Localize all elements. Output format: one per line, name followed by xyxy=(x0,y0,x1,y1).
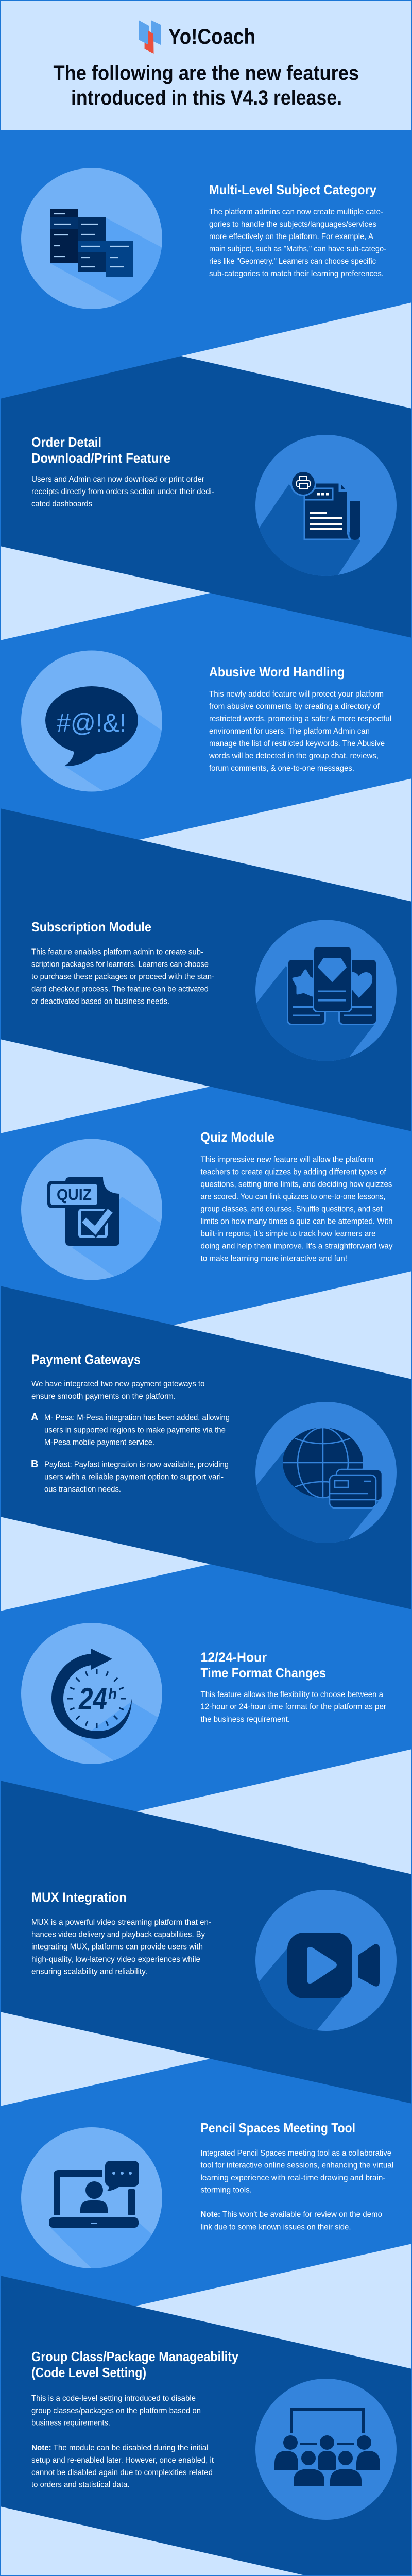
panel: subscription module xyxy=(31,919,397,1069)
panel: light wedge right 5 xyxy=(135,2244,412,2369)
heading: Group Class/Package Manageability xyxy=(31,2349,238,2364)
panel: light wedge right 1 xyxy=(181,302,412,409)
list item B xyxy=(31,1459,229,1494)
body text: Users and Admin can now download or print order xyxy=(31,475,205,484)
title xyxy=(54,62,359,109)
heading: Order Detail xyxy=(31,434,101,450)
heading xyxy=(201,1650,326,1681)
list item A: A xyxy=(31,1412,38,1423)
heading: Time Format Changes xyxy=(201,1665,326,1681)
body text: or deactivated based on business needs. xyxy=(31,997,169,1006)
body text: cannot be disabled again due to complexities related xyxy=(31,2468,213,2477)
icon: globe and card xyxy=(255,1402,397,1543)
list item A: M- Pesa: M-Pesa integration has been added, allowing xyxy=(44,1414,230,1422)
body text: This is a code-level setting introduced to disable xyxy=(31,2394,196,2403)
list item B: ous transaction needs. xyxy=(44,1485,121,1494)
heading: Quiz Module xyxy=(200,1129,274,1145)
panel: dark band 2 xyxy=(0,808,412,1131)
panel: light wedge right 3 xyxy=(174,1271,412,1379)
panel: abusive word handling xyxy=(21,650,391,804)
heading xyxy=(31,2349,238,2380)
body text xyxy=(31,1918,211,1976)
body text xyxy=(31,475,214,509)
intro text xyxy=(31,1380,205,1401)
panel: payment gateways xyxy=(31,1352,397,1556)
body text: Note: The module can be disabled during the initial xyxy=(31,2444,208,2452)
body text: receipts directly from orders section under their dedi- xyxy=(31,487,214,496)
intro text: We have integrated two new payment gateways to xyxy=(31,1380,205,1388)
body text: The platform admins can now create multiple cate- xyxy=(209,208,383,216)
body text: ries like "Geometry." Learners can choose specific xyxy=(209,257,376,266)
icon: category columns xyxy=(21,168,162,309)
icon: printable document xyxy=(255,435,397,576)
body text: link due to some known issues on their side. xyxy=(201,2223,351,2232)
body text: Note: This won't be available for review on the demo xyxy=(201,2210,382,2219)
body text: to make learning more interactive and fun! xyxy=(201,1254,347,1263)
icon: 24h clock: h xyxy=(108,1686,117,1703)
body text: MUX is a powerful video streaming platform that en- xyxy=(31,1918,211,1927)
panel: light wedge left 2 xyxy=(0,1039,210,1133)
body text: storming tools. xyxy=(201,2185,252,2195)
body text: ensuring scalability and reliability. xyxy=(31,1967,147,1976)
body text: This feature enables platform admin to create sub- xyxy=(31,948,203,956)
heading: (Code Level Setting) xyxy=(31,2365,146,2380)
body text: high-quality, low-latency video experiences while xyxy=(31,1955,200,1964)
heading: Pencil Spaces Meeting Tool xyxy=(201,2120,355,2136)
body text: This newly added feature will protect your platform xyxy=(209,690,384,699)
body text xyxy=(209,208,386,278)
heading: 12/24-Hour xyxy=(201,1650,267,1665)
panel: light wedge left 4 xyxy=(0,2012,210,2106)
body text: environment for users. The platform Admin can xyxy=(209,727,370,736)
body text: Integrated Pencil Spaces meeting tool as a collaborative xyxy=(201,2149,391,2158)
heading: Abusive Word Handling xyxy=(209,664,345,680)
heading xyxy=(31,434,170,466)
body text: the business requirement. xyxy=(201,1715,290,1724)
body text: This impressive new feature will allow the platform xyxy=(201,1155,374,1164)
body text: tool for interactive online sessions, enhancing the virtual xyxy=(201,2161,393,2170)
intro text: ensure smooth payments on the platform. xyxy=(31,1392,176,1401)
body text xyxy=(209,690,391,773)
list item B: Payfast: Payfast integration is now available, providing xyxy=(44,1460,229,1469)
heading: MUX Integration xyxy=(31,1890,127,1905)
body text xyxy=(31,2394,214,2489)
body text xyxy=(201,2149,393,2232)
list item A: users in supported regions to make payments via the xyxy=(44,1426,226,1434)
panel: dark band 4 xyxy=(0,1781,412,2104)
body text: forum comments, & one-to-one messages. xyxy=(209,764,354,773)
body text: group classes/packages on the platform based on xyxy=(31,2406,201,2415)
body text: group classes, and courses. Shuffle questions, and set xyxy=(201,1205,383,1214)
icon: quiz document: QUIZ xyxy=(57,1185,92,1204)
body text: cated dashboards xyxy=(31,500,92,509)
panel: 12/24-hour time format xyxy=(21,1623,386,1764)
panel: order detail download/print xyxy=(31,434,397,588)
icon: laptop video meeting xyxy=(21,2127,162,2268)
icon: speech bubble with symbols: #@!&! xyxy=(57,708,126,737)
panel: light wedge left 5 xyxy=(0,2506,307,2576)
icon: quiz document xyxy=(21,1139,162,1280)
heading: Multi-Level Subject Category xyxy=(209,182,376,197)
panel: dark band 1 xyxy=(0,356,412,638)
list item B: users with a reliable payment option to support vari- xyxy=(44,1472,224,1482)
body text xyxy=(201,1690,387,1724)
panel: light wedge right 4 xyxy=(136,1749,412,1874)
panel: pencil spaces meeting tool xyxy=(21,2120,393,2277)
list item A xyxy=(31,1412,230,1447)
icon: group class xyxy=(255,2379,397,2520)
body text: sub-categories to match their learning preferences. xyxy=(209,269,384,278)
body text: doing and help them improve. It’s a straightforward way xyxy=(201,1242,392,1251)
logo wordmark: Yo!Coach xyxy=(168,24,255,48)
body text: setup and re-enabled later. However, once enabled, it xyxy=(31,2456,214,2465)
body text xyxy=(31,948,214,1006)
list item A: M-Pesa mobile payment service. xyxy=(44,1438,154,1447)
body text: main subject, such as "Maths," can have sub-catego- xyxy=(209,245,386,253)
body text: 12-hour or 24-hour time format for the platform as per xyxy=(201,1702,387,1711)
panel: light wedge left 1 xyxy=(0,546,210,640)
body text: restricted words, promoting a safer & more respectful xyxy=(209,715,391,723)
body text: to purchase these packages or proceed with the stan- xyxy=(31,973,214,981)
body text: built-in reports, it’s simple to track how learners are xyxy=(201,1229,376,1239)
panel: MUX integration xyxy=(31,1890,397,2040)
panel: light wedge left 3 xyxy=(0,1517,210,1611)
body text: questions, setting time limits, and deciding how quizzes xyxy=(201,1180,392,1189)
panel: multi-level subject category xyxy=(21,168,386,319)
logo mark xyxy=(139,20,161,54)
icon: speech bubble with symbols xyxy=(21,650,162,791)
panel: group class/package manageability xyxy=(31,2349,397,2520)
body text: words will be detected in the group chat, reviews, xyxy=(209,752,379,760)
list item B: B xyxy=(31,1459,38,1470)
icon: 24h clock xyxy=(21,1623,162,1764)
panel: dark band 5 xyxy=(0,2276,412,2576)
body text: This feature allows the flexibility to choose between a xyxy=(201,1690,383,1699)
heading: Payment Gateways xyxy=(31,1352,141,1367)
panel: light wedge right 2 xyxy=(139,778,412,902)
body text: are scored. You can link quizzes to one-to-one lessons, xyxy=(201,1192,385,1201)
title: introduced in this V4.3 release. xyxy=(71,87,342,109)
body text: integrating MUX, platforms can provide users with xyxy=(31,1942,203,1952)
body text: learning experience with real-time drawing and brain- xyxy=(201,2174,385,2182)
body text: hances video delivery and playback capabilities. By xyxy=(31,1930,205,1939)
body text: dard checkout process. The feature can be activated xyxy=(31,985,209,993)
panel: dark band 3 xyxy=(0,1286,412,1609)
body text: to orders and statistical data. xyxy=(31,2480,130,2489)
icon: video camera xyxy=(255,1890,397,2031)
panel: quiz module xyxy=(21,1132,392,1280)
body text: scription packages for learners. Learners can choose xyxy=(31,960,209,969)
body text: gories to handle the subjects/languages/services xyxy=(209,220,376,229)
heading: Subscription Module xyxy=(31,919,151,935)
body text: limits on how many times a quiz can be attempted. With xyxy=(201,1217,392,1226)
body text: manage the list of restricted keywords. The Abusive xyxy=(209,739,385,748)
body text: teachers to create quizzes by adding different types of xyxy=(201,1167,386,1177)
icon: 24h clock: 24 xyxy=(78,1682,107,1716)
body text xyxy=(201,1155,392,1263)
body text: from abusive comments by creating a directory of xyxy=(209,702,380,711)
heading: Download/Print Feature xyxy=(31,450,170,466)
body text: more effectively on the platform. For example, A xyxy=(209,232,373,241)
title: The following are the new features xyxy=(54,62,359,84)
panel: header xyxy=(0,0,412,130)
body text: business requirements. xyxy=(31,2418,110,2428)
icon: subscription cards xyxy=(255,920,397,1061)
